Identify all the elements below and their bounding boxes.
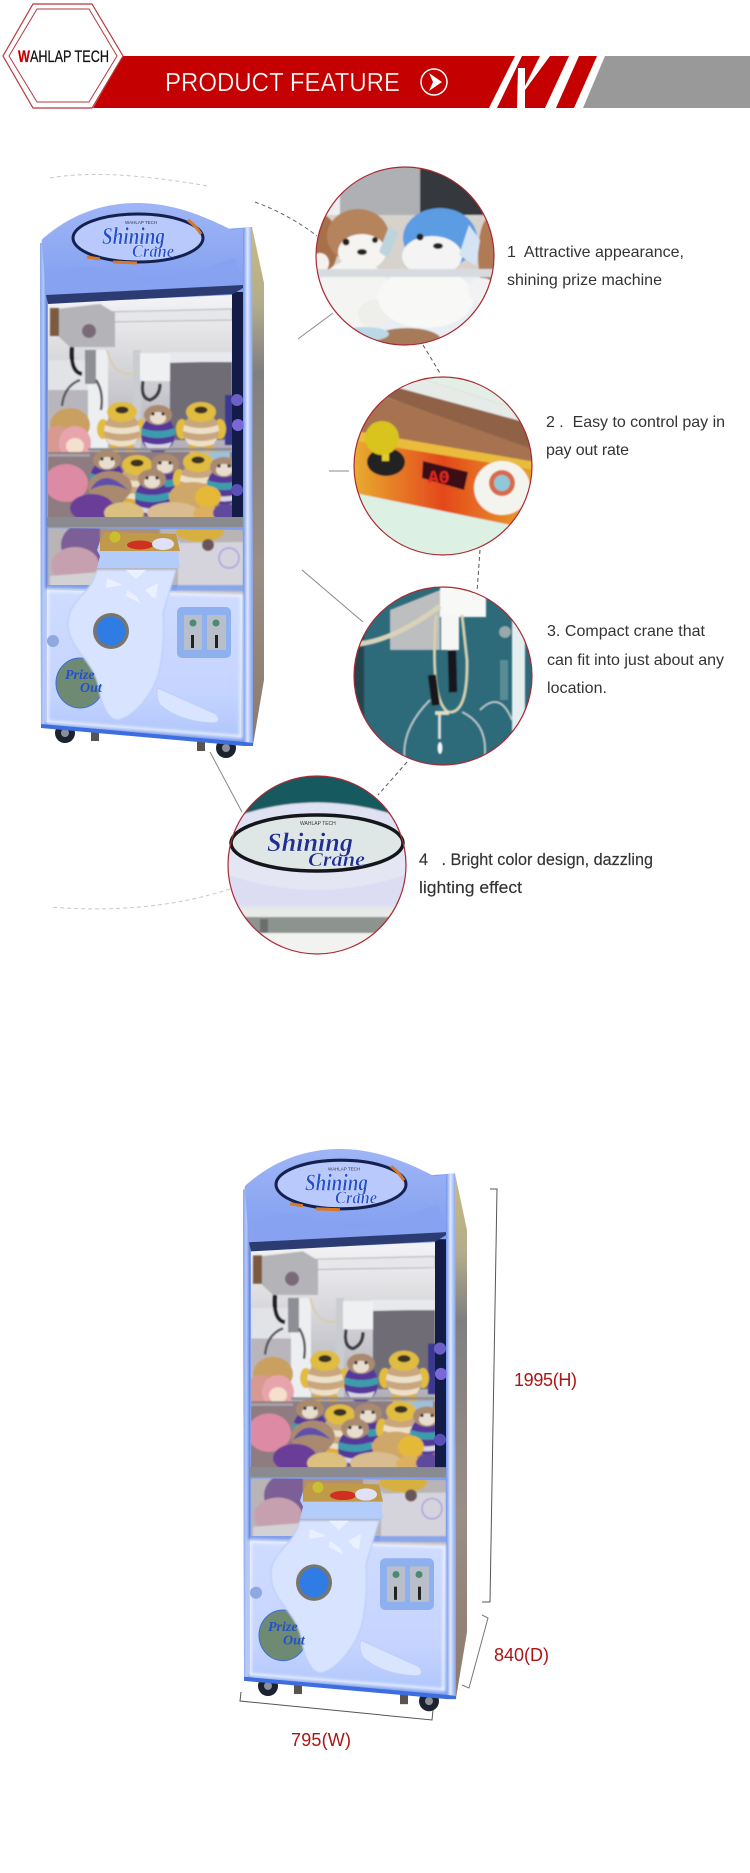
prize out label (65, 668, 103, 696)
machine marquee text (305, 1166, 377, 1208)
connector lines (50, 174, 480, 909)
feature text 4: 4 . Bright color design, dazzling (419, 850, 653, 869)
sign lettering: WAHLAP TECH (300, 821, 336, 827)
machine marquee text: Crane (132, 241, 174, 261)
machine marquee text: Shining (102, 224, 165, 250)
machine marquee text: WAHLAP TECH (125, 220, 157, 225)
feature text 1 (507, 244, 684, 289)
machine marquee text: Shining (305, 1169, 368, 1197)
machine marquee text: Crane (335, 1188, 377, 1208)
feature text 1: 1 Attractive appearance, (507, 244, 684, 261)
feature text 2: pay out rate (546, 442, 629, 459)
sign lettering: Shining (267, 828, 353, 857)
sign lettering: Crane (308, 849, 365, 871)
feature text 1: shining prize machine (507, 272, 662, 289)
feature text 3: can fit into just about any (547, 652, 724, 669)
width dimension bracket (240, 1692, 433, 1720)
detail circle 4: marquee sign (225, 775, 410, 958)
banner title: PRODUCT FEATURE (165, 67, 400, 97)
feature text 3: location. (547, 680, 607, 697)
detail circle 1: plush toys (315, 166, 495, 346)
detail circle 2: control panel (350, 375, 540, 560)
hexagon logo (3, 4, 123, 108)
detail circle 3: crane claw (352, 585, 532, 765)
machine marquee text (102, 220, 174, 261)
sign lettering (267, 821, 365, 871)
feature text 3 (547, 623, 724, 697)
prize out label: Prize (65, 668, 95, 683)
feature text 2 (546, 414, 725, 459)
feature text 2: 2 . Easy to control pay in (546, 414, 725, 431)
header banner (3, 4, 750, 108)
label: width: 795(W) (291, 1730, 351, 1750)
machine marquee text: WAHLAP TECH (328, 1166, 360, 1171)
detail circle 2: control panel: A0 (428, 469, 450, 489)
prize out label (268, 1619, 306, 1648)
claw machine photo, dimensions (243, 1149, 467, 1711)
prize out label: Out (283, 1632, 306, 1648)
feature text 4 (419, 850, 653, 897)
prize out label: Prize (268, 1619, 298, 1635)
feature text 3: 3. Compact crane that (547, 623, 706, 640)
depth dimension bracket (462, 1615, 488, 1688)
grey banner end (583, 56, 750, 108)
height dimension bracket (482, 1189, 497, 1602)
banner stripes (497, 56, 597, 108)
icon: arrow in circle (421, 69, 447, 95)
label: depth: 840(D) (494, 1645, 549, 1665)
prize out label: Out (80, 681, 103, 696)
feature text 4: lighting effect (419, 878, 522, 897)
claw machine photo, top (40, 203, 264, 758)
logo wordmark: WAHLAP TECH (18, 47, 109, 66)
red banner (93, 56, 515, 108)
label: height: 1995(H) (514, 1370, 577, 1390)
